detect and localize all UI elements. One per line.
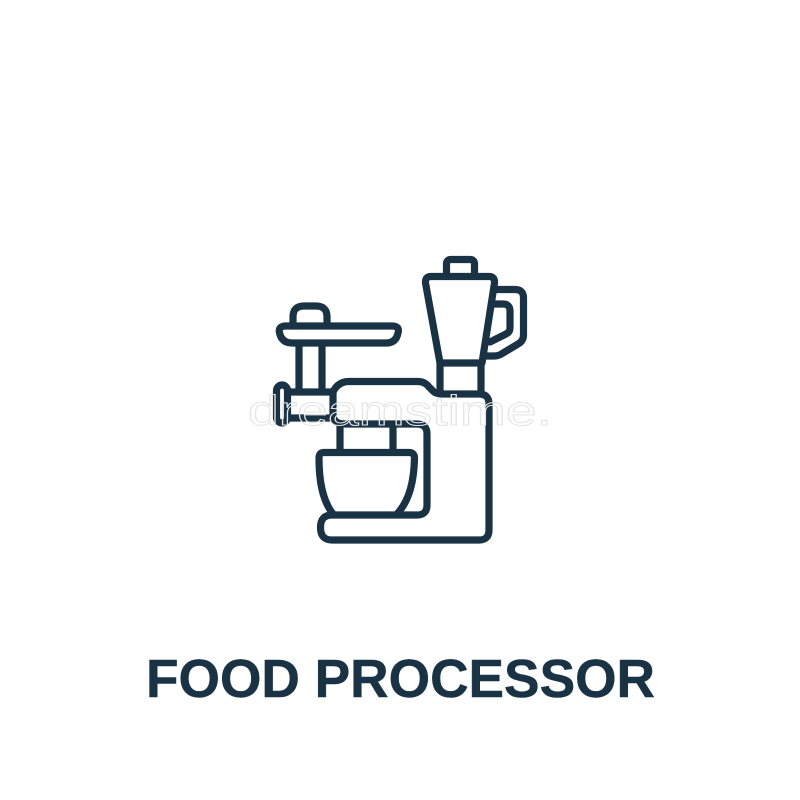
- watermark: dreamstime.: [248, 387, 552, 434]
- meat grinder flange: [276, 385, 288, 423]
- mixer body: [320, 382, 489, 540]
- blender handle: [484, 290, 524, 356]
- blender jar: [425, 276, 495, 363]
- meat grinder tray: [279, 326, 398, 343]
- icon: food processor: [276, 260, 524, 540]
- meat grinder barrel: [290, 392, 333, 418]
- bowl: [319, 452, 414, 514]
- meat grinder hopper: [293, 306, 327, 325]
- bowl supports: [340, 424, 393, 452]
- blender lid: [446, 260, 474, 274]
- blender neck: [440, 363, 481, 393]
- meat grinder neck: [299, 343, 322, 391]
- title: FOOD PROCESSOR: [146, 650, 655, 709]
